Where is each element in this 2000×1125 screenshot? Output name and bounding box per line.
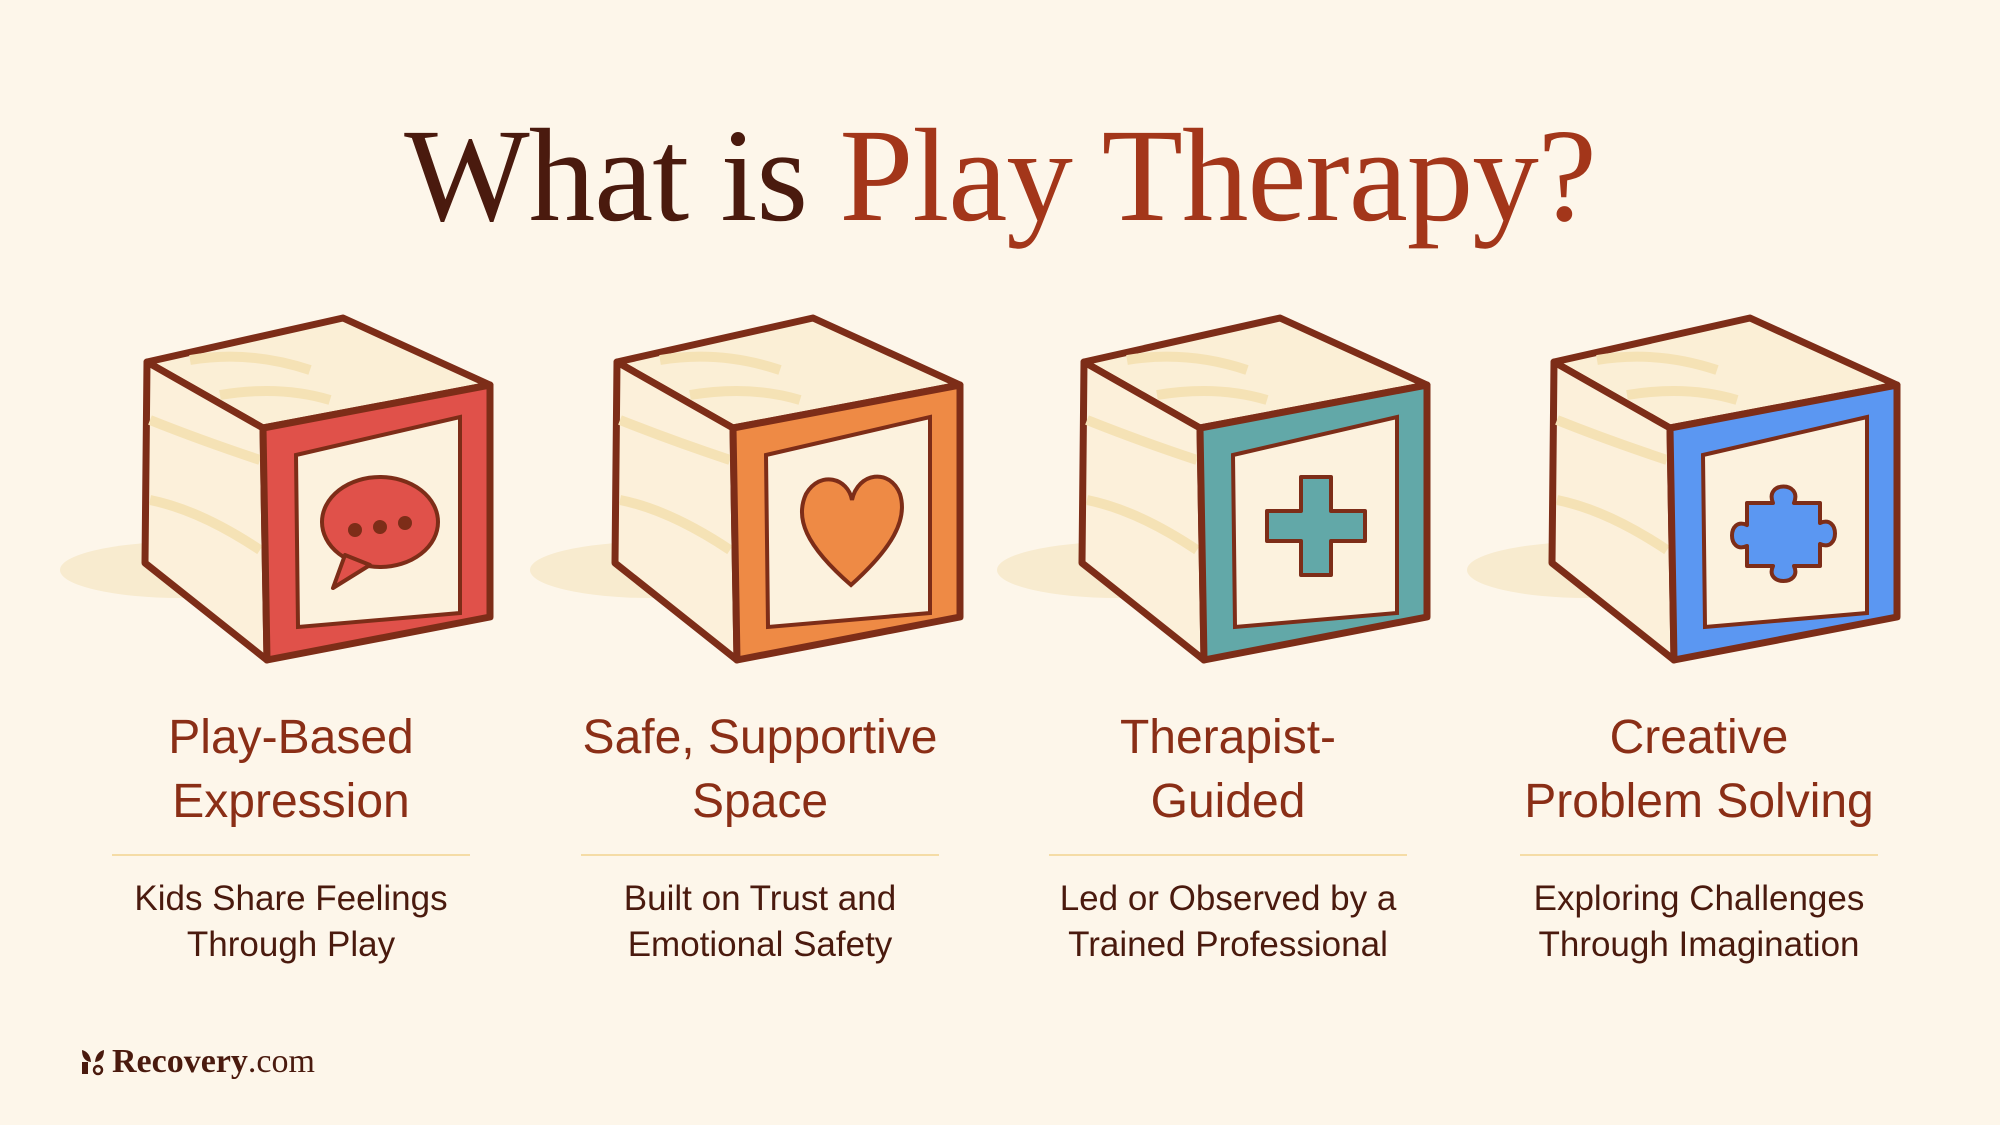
column 1: Through Play (187, 925, 395, 964)
column 2 (581, 711, 939, 964)
column 2: Safe, Supportive (583, 711, 937, 764)
icon: speech bubble (322, 477, 438, 588)
block 2: orange heart (530, 318, 960, 660)
column 4: Creative (1610, 711, 1788, 764)
column 3: Therapist- (1120, 711, 1336, 764)
column 4: Exploring Challenges (1534, 879, 1864, 918)
column 4 (1520, 711, 1878, 964)
column 2: Built on Trust and (624, 879, 896, 918)
column 3: Guided (1151, 775, 1305, 828)
column 4: Through Imagination (1538, 925, 1860, 964)
column 1: Kids Share Feelings (134, 879, 448, 918)
column 1: Expression (172, 775, 410, 828)
column 1 (112, 711, 470, 964)
column 4: Problem Solving (1524, 775, 1874, 828)
column 3: Trained Professional (1068, 925, 1388, 964)
blocks illustration (60, 314, 1900, 664)
icon: heart (802, 477, 902, 585)
column 3: Led or Observed by a (1060, 879, 1396, 918)
block 4: blue puzzle (1467, 318, 1897, 660)
column 3 (1049, 711, 1407, 964)
column 2: Space (692, 775, 828, 828)
icon: puzzle (1732, 486, 1835, 581)
icon: plus (1267, 477, 1365, 575)
block 1: red speech (60, 318, 490, 660)
column 2: Emotional Safety (628, 925, 892, 964)
block 3: teal plus (997, 318, 1427, 660)
logo: Recovery.com (112, 1043, 315, 1080)
column 1: Play-Based (168, 711, 414, 764)
title: What is Play Therapy? (404, 101, 1596, 249)
